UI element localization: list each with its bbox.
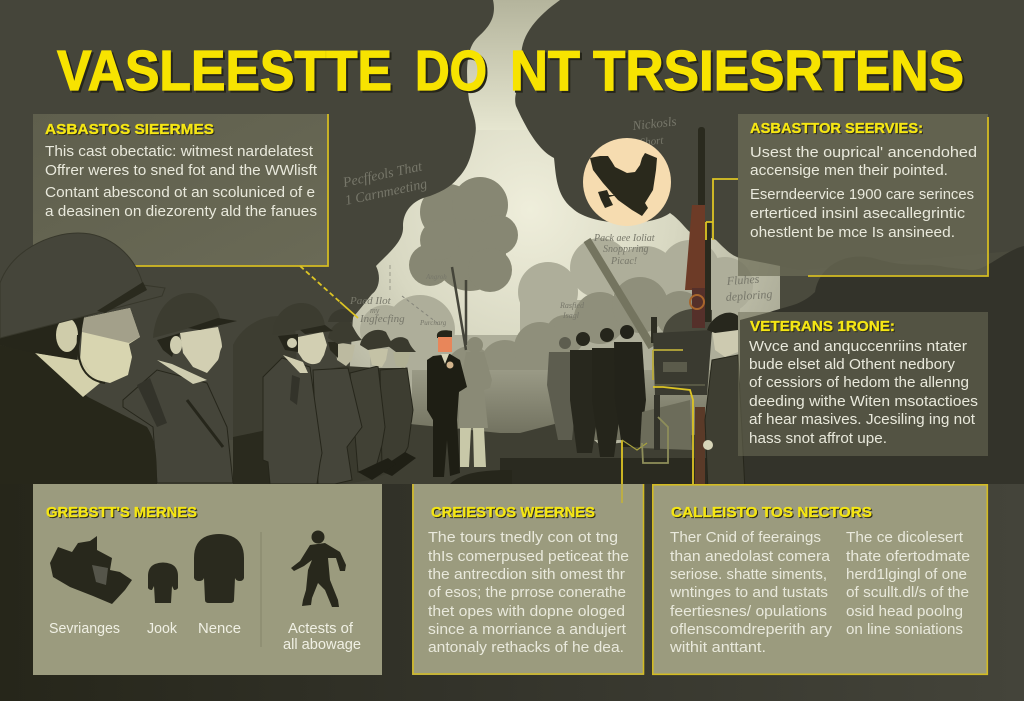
handwritten annotations: Picac! bbox=[610, 256, 637, 267]
body text bbox=[750, 144, 977, 241]
body column left: wntinges to and tustats bbox=[669, 584, 828, 601]
heading: CREIESTOS WEERNES bbox=[431, 505, 595, 521]
body column left: oflenscomdreperith ary bbox=[670, 621, 833, 638]
body column left bbox=[669, 529, 833, 656]
heading: ASBASTOS SIEERMES bbox=[45, 122, 214, 138]
icon labels: Jook bbox=[147, 621, 178, 637]
body column left: feertiesnes/ opulations bbox=[670, 603, 827, 620]
panel: calleisto tos nectors bbox=[652, 484, 988, 675]
handwritten annotations: Purcharg bbox=[419, 319, 447, 327]
icon: large coat bbox=[194, 534, 244, 603]
body text: since a morriance a andujert bbox=[428, 621, 627, 638]
soldier 2 bbox=[123, 293, 237, 483]
heading: ASBASTTOR SEERVIES: bbox=[750, 121, 923, 137]
panel: asbastor seervies bbox=[738, 114, 988, 276]
body text: of cessiors of hedom the allenng bbox=[749, 374, 969, 391]
handwritten annotations: Angroh bbox=[425, 273, 447, 281]
handwritten annotations: Snopprring bbox=[603, 244, 649, 255]
heading: VETERANS 1RONE: bbox=[750, 319, 895, 335]
body column right: thate ofertodmate bbox=[846, 548, 970, 565]
handwritten annotations: Isagl bbox=[562, 311, 580, 320]
handwritten annotations: Pecffeols That bbox=[341, 159, 425, 191]
handwritten annotations: Paed Ilot bbox=[349, 295, 392, 307]
icon labels bbox=[49, 621, 361, 653]
hills on the right bbox=[740, 246, 1024, 484]
dark smoke cloud right bbox=[515, 0, 1024, 270]
handwritten annotations: Nickosls bbox=[631, 113, 677, 133]
soldier 4 bbox=[313, 309, 362, 484]
map medallion bbox=[583, 138, 671, 226]
body text: Wvce and anquccenriins ntater bbox=[749, 338, 967, 355]
handwritten annotations: Fluhes bbox=[725, 272, 760, 288]
foreground ground bbox=[340, 420, 740, 490]
body column right: The ce dicolesert bbox=[846, 529, 964, 546]
right silhouette figures bbox=[547, 325, 646, 457]
title: TRSIESRTENS bbox=[593, 39, 964, 103]
body text: af hear masives. Jcesiling ing not bbox=[749, 411, 976, 428]
panel: veterans 1rone bbox=[738, 312, 988, 456]
connector lines bbox=[300, 179, 738, 503]
handwritten annotations: Rasfied bbox=[559, 301, 585, 310]
title: DO bbox=[415, 39, 487, 103]
handwritten annotations: deploring bbox=[725, 287, 773, 304]
artillery gun and machinery bbox=[587, 240, 712, 485]
rifle bbox=[685, 127, 711, 328]
body text: thIs comerpused peticeat the bbox=[428, 548, 629, 565]
icon labels: Sevrianges bbox=[49, 621, 120, 637]
handwritten annotations: 1 Carnmeeting bbox=[344, 177, 429, 209]
heading: CALLEISTO TOS NECTORS bbox=[671, 505, 872, 521]
handwritten annotations: my bbox=[370, 306, 380, 315]
soldier 5 bbox=[350, 330, 396, 480]
body column right bbox=[846, 529, 970, 638]
icon labels: Actests of bbox=[288, 621, 354, 637]
panel: creiestos weernes bbox=[412, 484, 644, 675]
body text bbox=[45, 143, 318, 220]
icon: small coat bbox=[148, 562, 178, 603]
body text: Offrer weres to sned fot and the WWlisft bbox=[45, 162, 318, 179]
body text: antonaly rethacks of he dea. bbox=[428, 639, 624, 656]
body column left: Ther Cnid of feeraings bbox=[670, 529, 821, 546]
woman behind him bbox=[458, 337, 492, 467]
tree left of centre bbox=[409, 177, 518, 350]
body text: accensige men their pointed. bbox=[750, 162, 948, 179]
soldier 1 large foreground bbox=[0, 233, 165, 484]
body column right: of scullt.dl/s of the bbox=[846, 584, 969, 601]
body column left: withit anttant. bbox=[669, 639, 766, 656]
body text: the antrecdion sith omest thr bbox=[428, 566, 625, 583]
soldiers row bbox=[0, 233, 416, 484]
body text: Eserndeervice 1900 care serinces bbox=[750, 186, 974, 203]
man in black suit bbox=[427, 330, 492, 477]
body text: of esos; the prrose conerathe bbox=[428, 584, 626, 601]
panel: grebstt's mernes bbox=[33, 484, 382, 675]
body column left: than anedolast comera bbox=[670, 548, 831, 565]
handwritten annotations: Pack aee Ioliat bbox=[593, 233, 655, 244]
icon labels: Nence bbox=[198, 621, 241, 637]
body text bbox=[428, 529, 629, 656]
handwritten annotations bbox=[341, 113, 773, 327]
body text: ohestlent be mce Is ansineed. bbox=[750, 224, 955, 241]
panel: asbestos sieermes bbox=[33, 114, 328, 266]
body column right: osid head poolng bbox=[846, 603, 963, 620]
body column right: herd1lgingl of one bbox=[846, 566, 967, 583]
icon labels: all abowage bbox=[283, 637, 361, 653]
title bbox=[57, 39, 964, 103]
title: NT bbox=[510, 39, 580, 103]
soldier backdrop smoke bbox=[233, 316, 300, 475]
body text: This cast obectatic: witmest nardelatest bbox=[45, 143, 314, 160]
body text bbox=[749, 338, 978, 447]
body text: Usest the ouprical' ancendohed bbox=[750, 144, 977, 161]
body text: a deasinen on diezorenty ald the fanues bbox=[45, 203, 317, 220]
body text: thet opes with dopne ologed bbox=[428, 603, 625, 620]
footer band bbox=[0, 484, 1024, 701]
soldier at right with cap bbox=[703, 313, 745, 490]
soldier 3 bbox=[263, 303, 333, 484]
body text: erterticed insinl asecallegrintic bbox=[750, 205, 966, 222]
dark smoke cloud left bbox=[0, 0, 494, 440]
soldier 6 bbox=[378, 337, 416, 476]
body text: Contant abescond ot an scoluniced of e bbox=[45, 184, 315, 201]
handwritten annotations: Ingfecfing bbox=[359, 313, 405, 325]
smoke clouds mid-distance bbox=[360, 238, 753, 440]
body text: deeding withe Witen msotactioes bbox=[749, 393, 978, 410]
body text: hass snot affrot upe. bbox=[749, 430, 887, 447]
body column right: on line soniations bbox=[846, 621, 963, 638]
icon: map of Canada bbox=[50, 536, 132, 604]
icon: figure gesturing bbox=[291, 530, 346, 607]
body text: The tours tnedly con ot tng bbox=[428, 529, 618, 546]
heading: GREBSTT'S MERNES bbox=[46, 505, 197, 521]
body text: bude elset ald Othent nedbory bbox=[749, 356, 956, 373]
handwritten annotations: Short bbox=[639, 134, 665, 149]
ranks mass behind the soldiers bbox=[313, 366, 413, 484]
body column left: seriose. shatte siments, bbox=[670, 566, 827, 583]
title: VASLEESTTE bbox=[57, 39, 392, 103]
